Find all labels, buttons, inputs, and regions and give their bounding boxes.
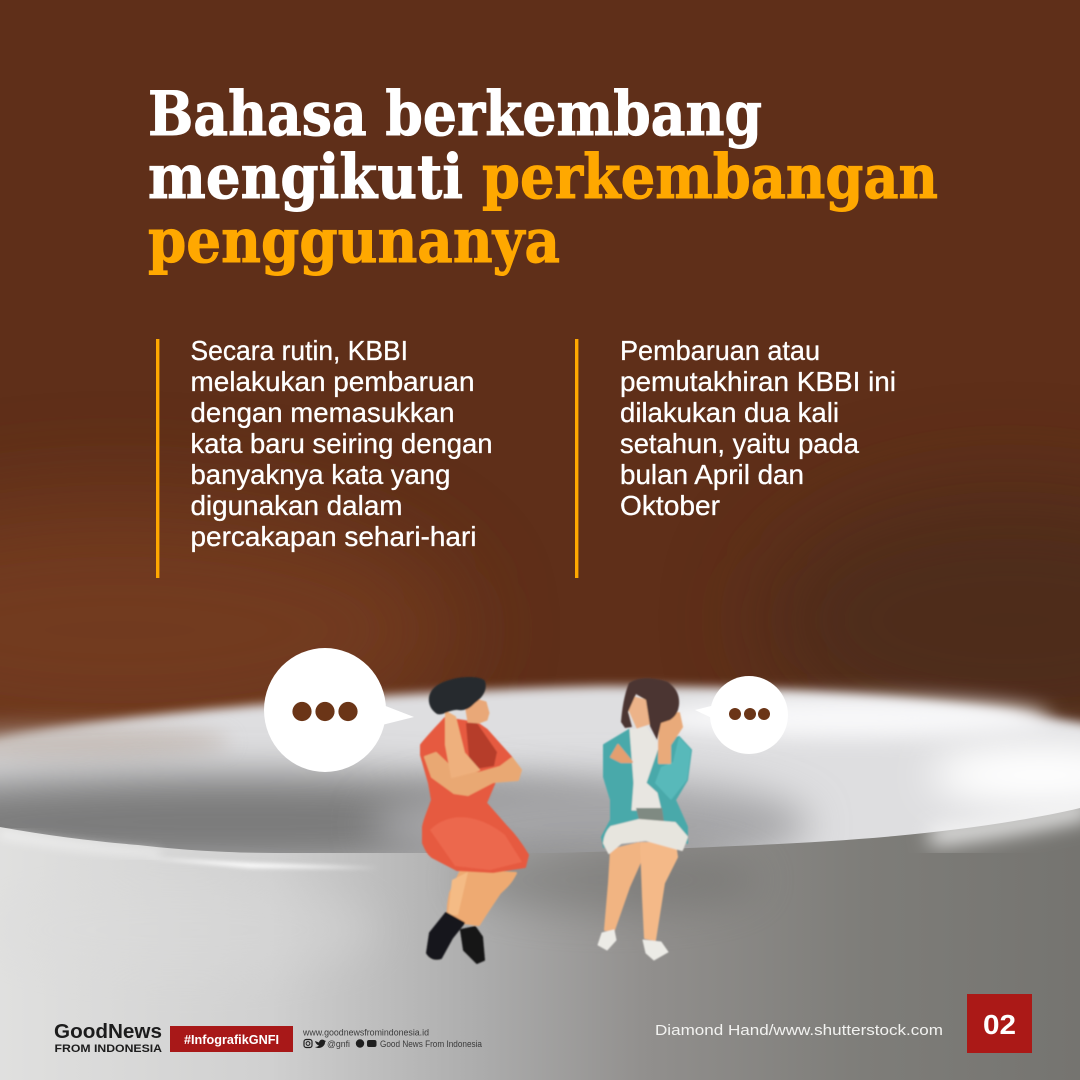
arms	[425, 753, 521, 795]
page number: 02	[983, 1009, 1016, 1040]
title: Bahasa berkembang	[148, 79, 762, 150]
social links: @gnfi	[327, 1039, 350, 1049]
icon: twitter	[315, 1040, 326, 1048]
speech bubble: left	[264, 648, 414, 772]
social links: www.goodnewsfromindonesia.id	[302, 1028, 429, 1038]
jacket	[602, 730, 691, 847]
left text block: dengan memasukkan	[190, 397, 454, 428]
right text block: Pembaruan atau	[620, 335, 820, 366]
title	[148, 79, 938, 277]
shoes	[427, 913, 464, 959]
photo credit: Diamond Hand/www.shutterstock.com	[655, 1023, 943, 1039]
right text block: bulan April dan	[620, 459, 804, 490]
icon: facebook	[356, 1039, 364, 1048]
mug interior and rim	[0, 686, 1080, 880]
hair	[621, 678, 679, 740]
logo: GoodNews From Indonesia	[54, 1020, 162, 1055]
white shirt	[630, 727, 661, 810]
page number	[967, 994, 1032, 1053]
hashtag badge: #InfografikGNFI	[184, 1032, 279, 1047]
logo: GoodNews From Indonesia: FROM INDONESIA	[54, 1043, 162, 1055]
raised hand	[659, 713, 682, 763]
title: penggunanya	[148, 206, 560, 277]
figure: woman in teal jacket	[598, 678, 691, 960]
left text block: Secara rutin, KBBI	[190, 335, 408, 366]
left text block: banyaknya kata yang	[190, 459, 450, 490]
figure: woman in red dress	[421, 677, 528, 963]
left column divider	[156, 339, 159, 578]
title: mengikuti	[148, 142, 463, 213]
left text block: kata baru seiring dengan	[190, 428, 492, 459]
left text block: digunakan dalam	[190, 490, 402, 521]
right column divider	[575, 339, 578, 578]
face	[466, 700, 489, 723]
skirt	[604, 820, 687, 853]
legs	[605, 843, 641, 930]
social links	[302, 1028, 482, 1049]
icon: youtube	[367, 1040, 376, 1047]
left text block: melakukan pembaruan	[190, 366, 474, 397]
right text block: Oktober	[620, 490, 720, 521]
left text block: percakapan sehari-hari	[190, 521, 476, 552]
dress	[421, 718, 528, 872]
legs	[448, 870, 516, 925]
right text block: setahun, yaitu pada	[620, 428, 860, 459]
mug body	[0, 808, 1080, 1080]
right text block: dilakukan dua kali	[620, 397, 839, 428]
face	[629, 697, 652, 728]
right text block: pemutakhiran KBBI ini	[620, 366, 896, 397]
social links: Good News From Indonesia	[380, 1039, 482, 1049]
title: perkembangan	[482, 142, 938, 213]
left text block	[190, 335, 492, 552]
shoes	[598, 930, 616, 950]
icon: instagram	[304, 1040, 312, 1048]
speech bubble: right	[695, 676, 788, 754]
hashtag badge	[170, 1026, 293, 1052]
logo: GoodNews From Indonesia: GoodNews	[54, 1020, 162, 1043]
left hand	[611, 745, 632, 762]
hair	[429, 677, 486, 714]
right text block	[620, 335, 896, 521]
